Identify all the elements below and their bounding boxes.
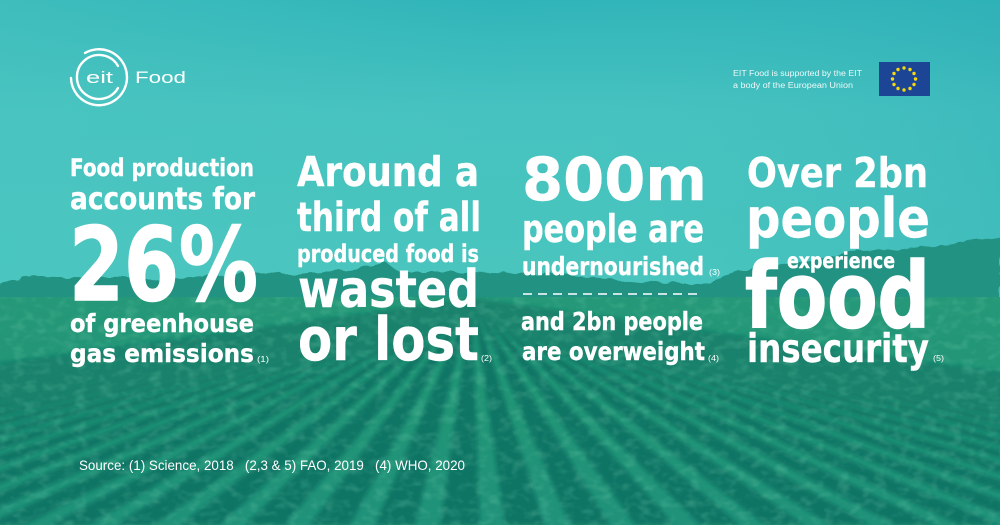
statistic 3: undernourished and overweight: (3) xyxy=(709,268,720,277)
statistic 4: food insecurity: Over 2bn xyxy=(747,149,928,197)
support statement xyxy=(733,69,862,90)
statistic 2: food wasted or lost: (2) xyxy=(481,354,492,363)
statistic 1: greenhouse gas emissions: (1) xyxy=(257,355,269,364)
logo: EIT Food xyxy=(71,49,186,105)
icon: EU flag xyxy=(879,62,930,96)
statistic 4: food insecurity: experience xyxy=(787,249,895,273)
statistic 1: greenhouse gas emissions: 26% xyxy=(69,206,258,325)
statistic 2: food wasted or lost xyxy=(297,148,492,375)
source line: Source: (1) Science, 2018 (2,3 & 5) FAO, 2019 (4) WHO, 2020 xyxy=(79,457,465,473)
statistic 1: greenhouse gas emissions: gas emissions xyxy=(70,339,254,368)
statistic 2: food wasted or lost: or lost xyxy=(298,305,479,375)
statistic 3: undernourished and overweight: and 2bn people xyxy=(521,307,703,336)
statistic 3: undernourished and overweight: (4) xyxy=(708,354,719,363)
logo: EIT Food: eit xyxy=(86,68,113,87)
statistic 3: undernourished and overweight: undernourished xyxy=(522,252,704,281)
statistic 3: undernourished and overweight xyxy=(521,145,720,366)
background: sky xyxy=(0,0,1000,310)
statistic 3: undernourished and overweight: are overweight xyxy=(522,337,705,366)
statistic 2: food wasted or lost: third of all xyxy=(297,195,481,241)
statistic 1: greenhouse gas emissions xyxy=(69,154,269,368)
statistic 4: food insecurity: (5) xyxy=(933,354,944,363)
statistic 1: greenhouse gas emissions: accounts for xyxy=(70,182,255,217)
statistic 4: food insecurity: people xyxy=(746,187,930,250)
statistic 2: food wasted or lost: wasted xyxy=(298,260,479,320)
logo: EIT Food: Food xyxy=(135,68,186,87)
statistic 4: food insecurity: food xyxy=(745,244,930,349)
background: crop field xyxy=(0,297,1000,525)
statistic 2: food wasted or lost: Around a xyxy=(297,148,479,196)
statistic 4: food insecurity xyxy=(745,149,944,372)
support statement: a body of the European Union xyxy=(733,81,853,90)
statistic 1: greenhouse gas emissions: Food production xyxy=(70,154,254,182)
background: tree line xyxy=(0,236,1000,305)
statistic 3: undernourished and overweight: 800m xyxy=(522,145,707,215)
support statement: EIT Food is supported by the EIT xyxy=(733,69,862,78)
statistic 4: food insecurity: insecurity xyxy=(747,327,929,372)
statistic 1: greenhouse gas emissions: of greenhouse xyxy=(70,309,254,338)
statistic 2: food wasted or lost: produced food is xyxy=(297,240,479,268)
statistic 3: undernourished and overweight: people are xyxy=(522,207,704,251)
